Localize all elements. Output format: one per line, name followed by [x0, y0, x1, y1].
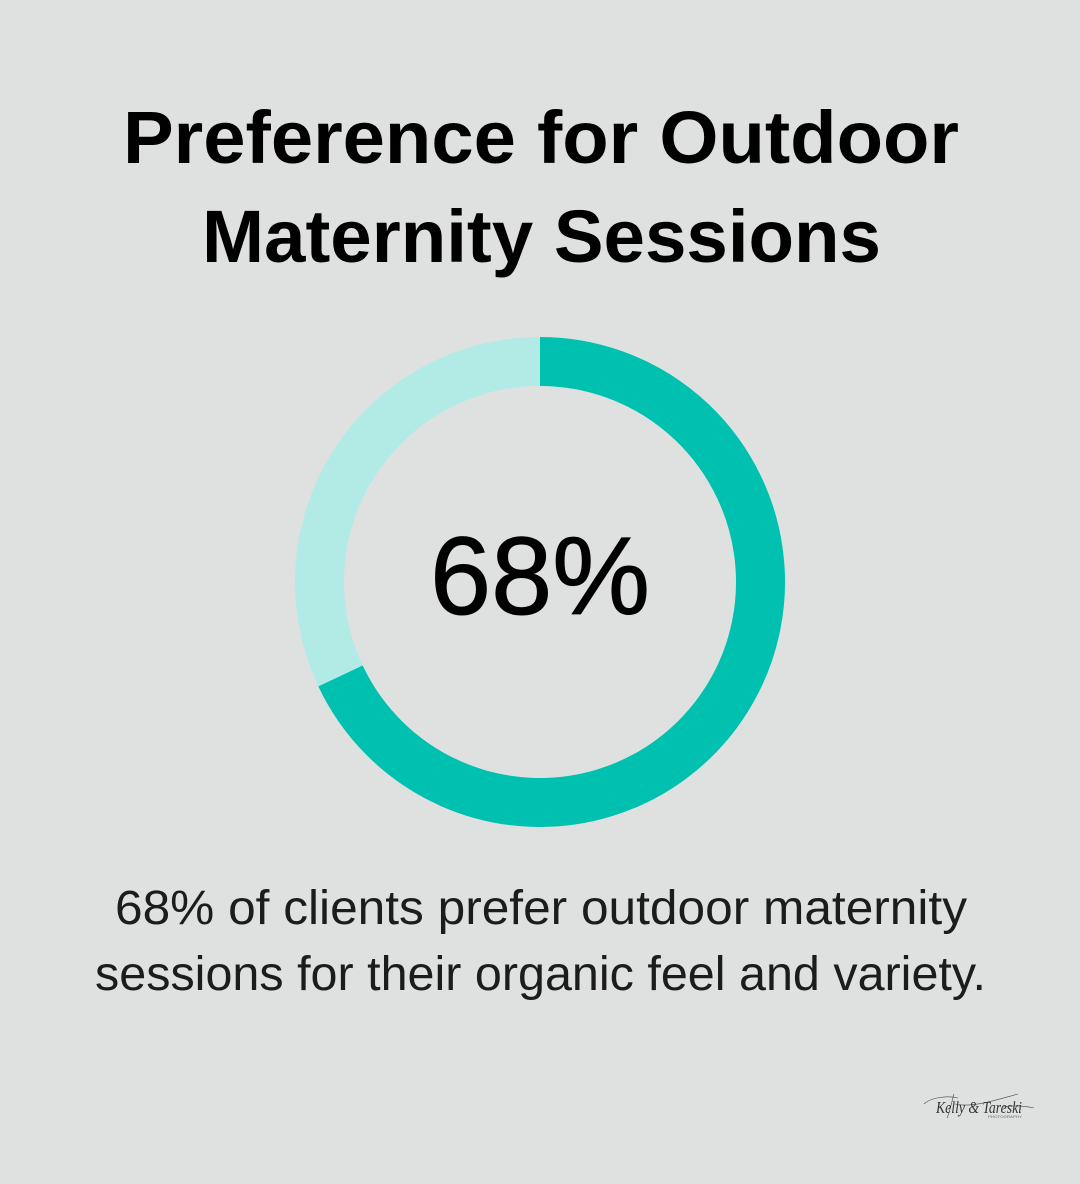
- center value: 68%: [430, 515, 650, 638]
- description text: 68% of clients prefer outdoor maternity: [115, 882, 967, 935]
- description text: sessions for their organic feel and variety.: [95, 948, 986, 1001]
- logo: Kelly & Tareski Photography: [924, 1094, 1034, 1119]
- logo: Kelly & Tareski Photography: Kelly & Tareski: [935, 1098, 1022, 1117]
- title: Maternity Sessions: [202, 195, 881, 278]
- logo: Kelly & Tareski Photography: PHOTOGRAPHY: [988, 1115, 1023, 1119]
- donut chart: 68 percent: [320, 362, 761, 802]
- title: [123, 96, 959, 278]
- title: Preference for Outdoor: [123, 96, 959, 179]
- description text: [95, 882, 986, 1001]
